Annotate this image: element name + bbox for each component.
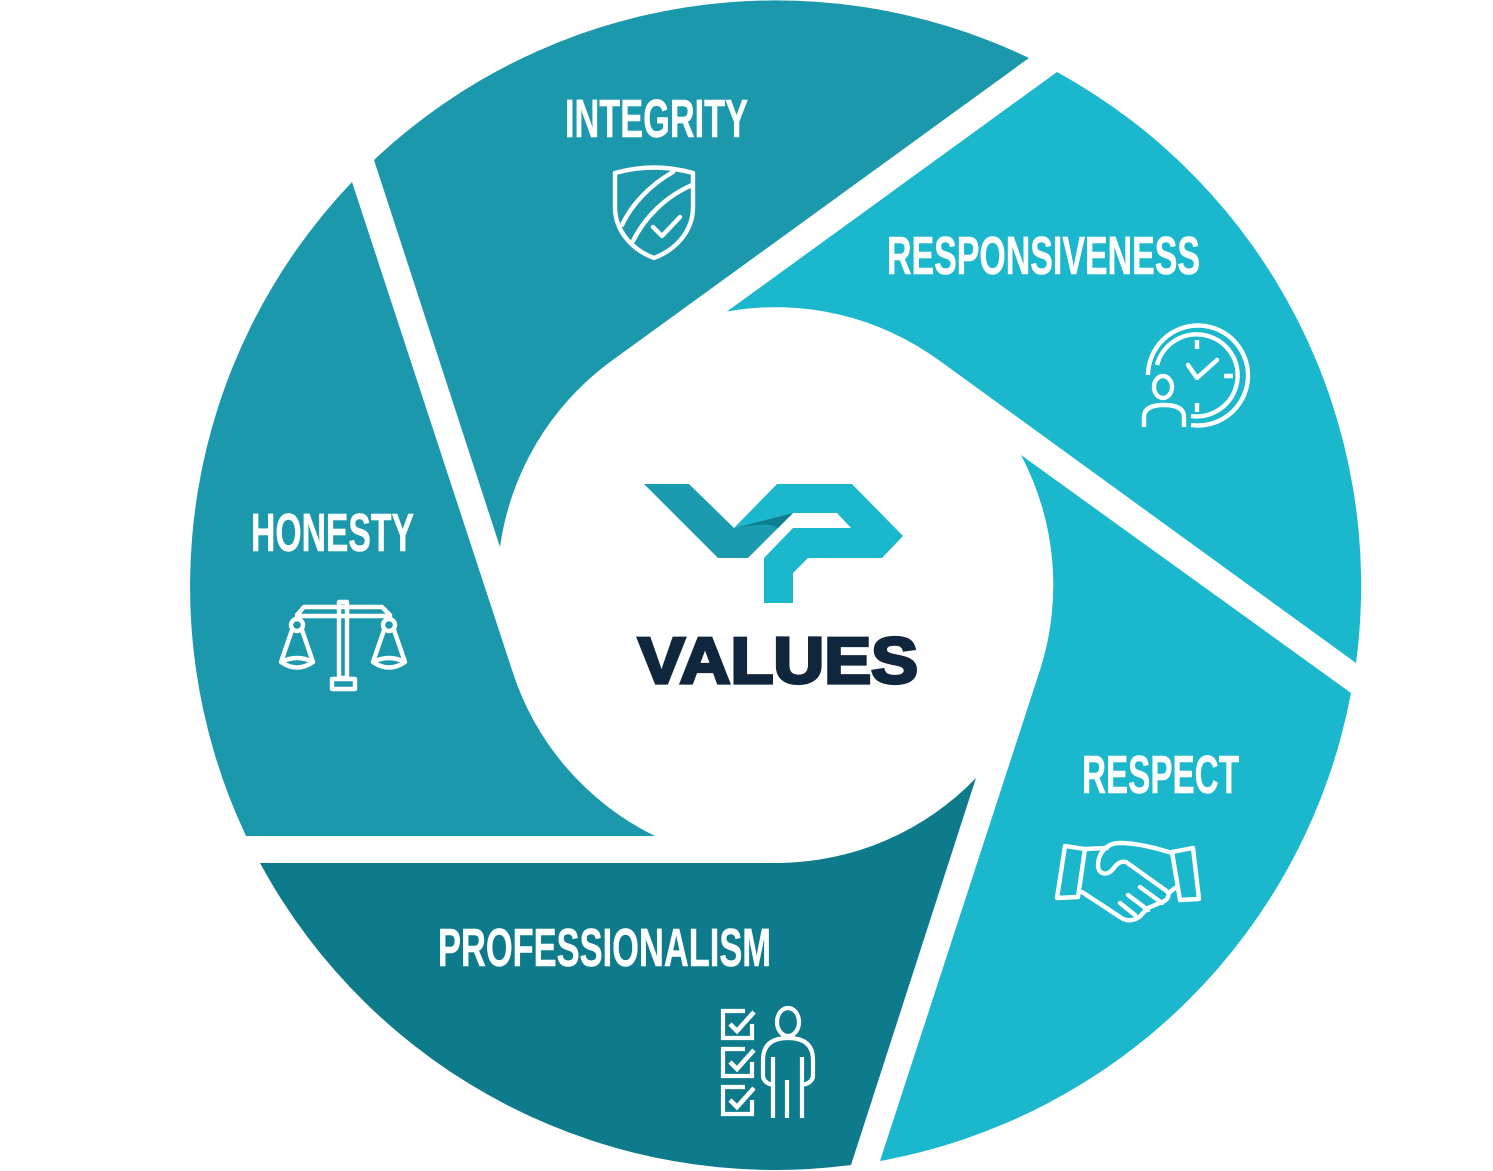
heading: responsiveness: RESPONSIVENESS — [887, 226, 1200, 286]
panel: respect — [880, 455, 1351, 1161]
heading: integrity: INTEGRITY — [565, 89, 748, 149]
icon: checklist with person — [723, 1008, 813, 1118]
icon: shield with check — [615, 168, 693, 258]
panel: integrity — [374, 0, 1029, 547]
logo letter P — [734, 484, 903, 603]
segment shape: integrity — [374, 0, 1029, 547]
logo letter V — [644, 484, 793, 558]
center title: VALUES — [638, 624, 918, 697]
heading: respect: RESPECT — [1082, 745, 1239, 805]
icon: handshake — [1057, 843, 1199, 920]
panel: responsiveness — [727, 72, 1361, 663]
icon: balance scales — [281, 602, 405, 689]
panel: honesty — [190, 182, 655, 836]
heading: honesty: HONESTY — [251, 503, 414, 563]
icon: clock with person — [1144, 325, 1248, 427]
segment shape: responsiveness — [727, 72, 1361, 663]
center logo: VP — [644, 484, 903, 603]
segment shape: respect — [880, 455, 1351, 1161]
segment shape: professionalism — [260, 778, 976, 1170]
heading: professionalism: PROFESSIONALISM — [438, 918, 771, 978]
panel: professionalism — [260, 778, 976, 1170]
segment shape: honesty — [190, 182, 655, 836]
logo fold shadow — [734, 513, 793, 528]
